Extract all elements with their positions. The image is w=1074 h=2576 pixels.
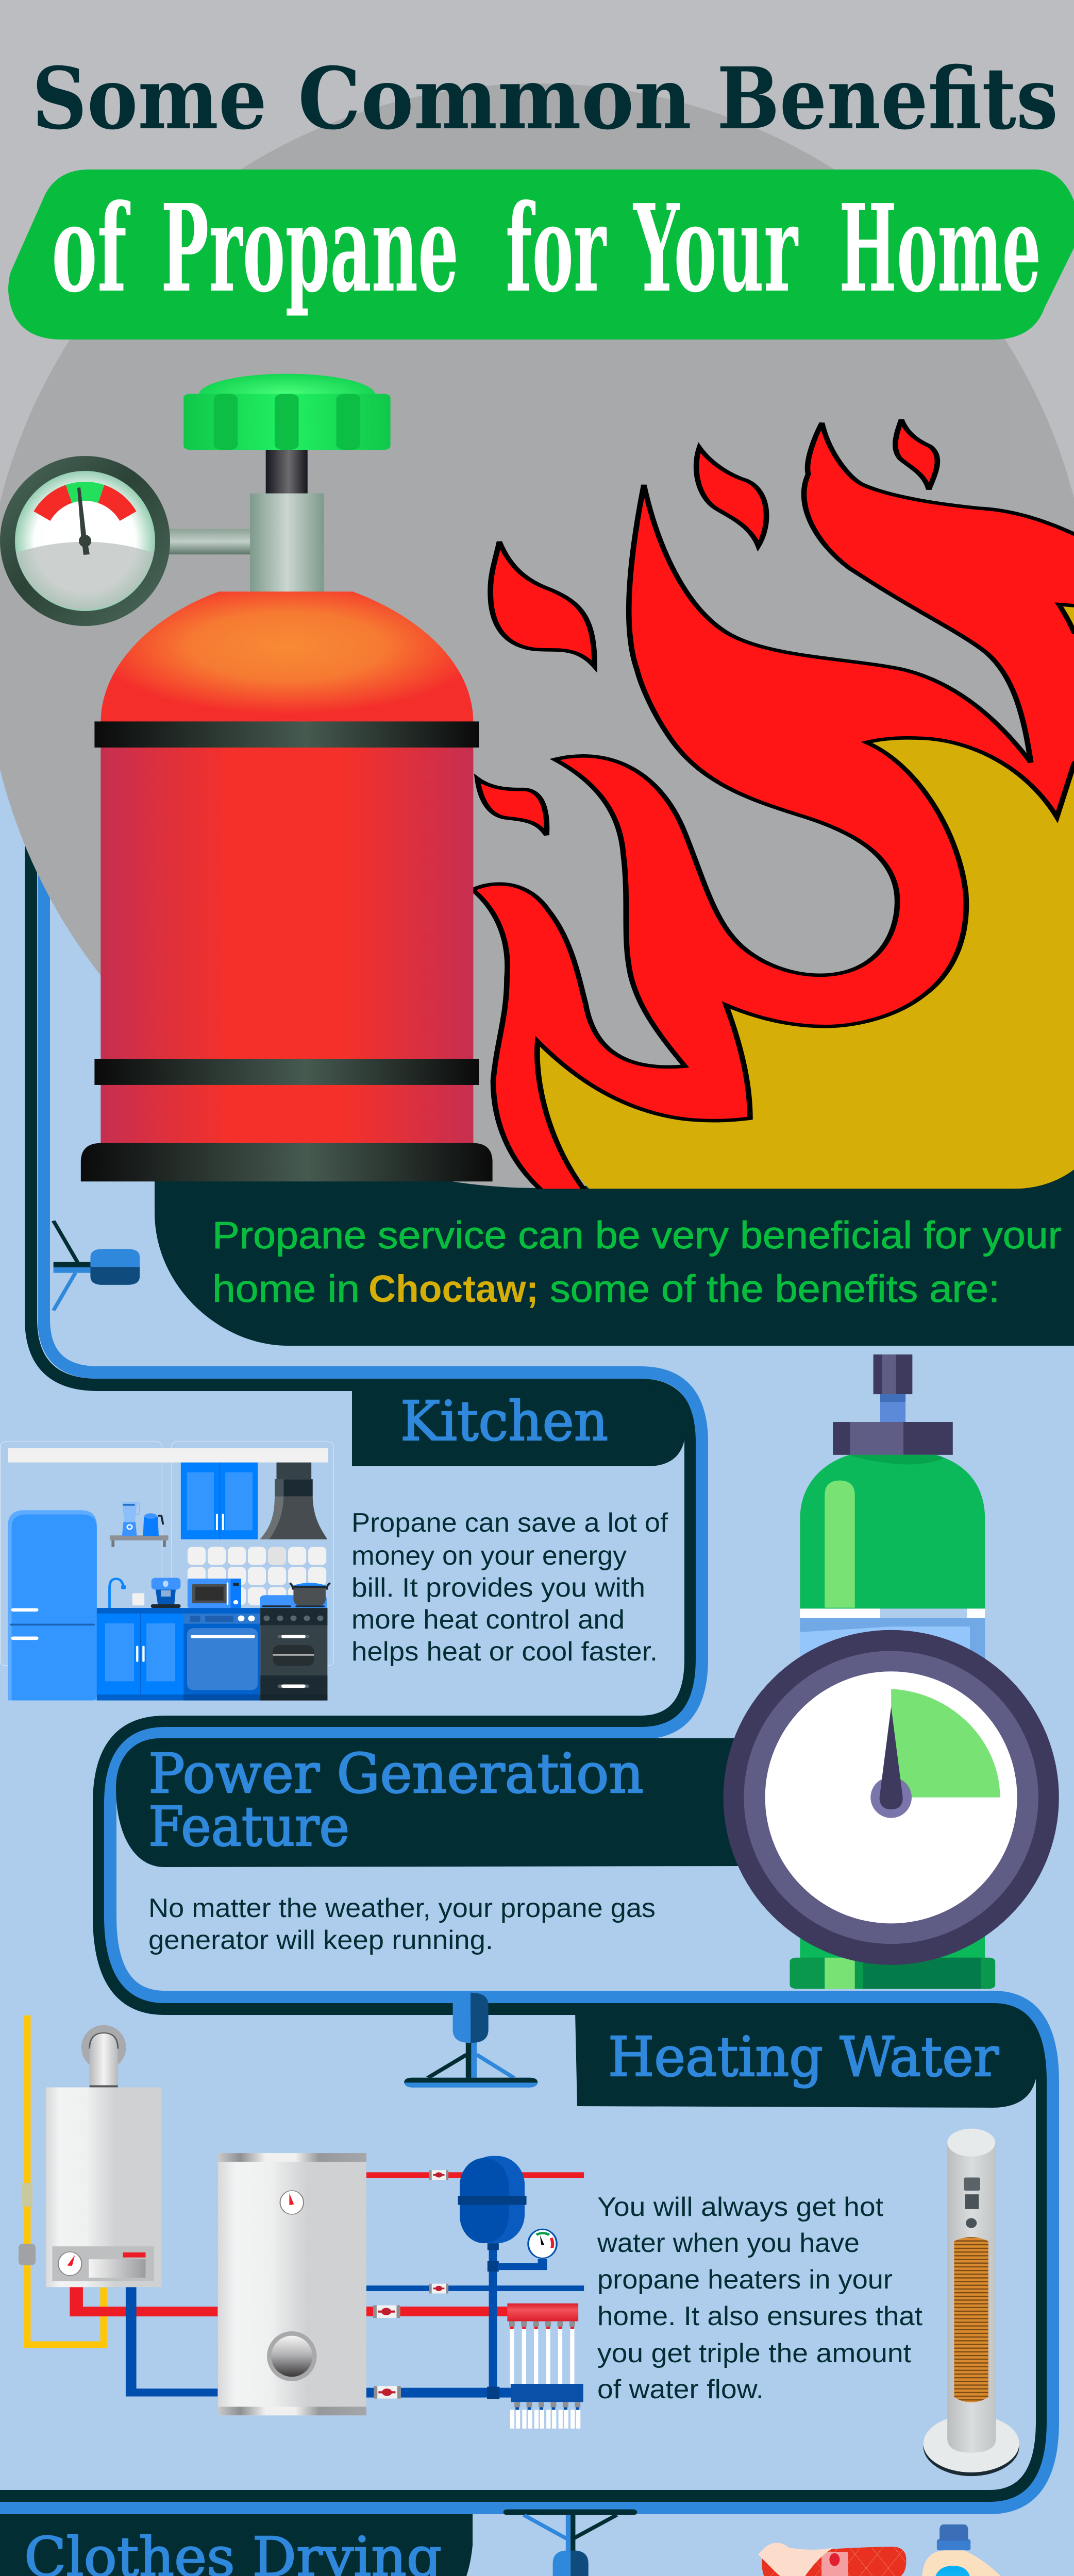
- title banner: Propane: [161, 178, 459, 319]
- illustration: green cylinder with gauge: [724, 1354, 1059, 1989]
- icon: yellow gas line: [19, 2015, 104, 2345]
- outgoing pipes: [366, 2172, 584, 2399]
- blue manifold: [510, 2384, 583, 2429]
- fridge: [8, 1510, 97, 1701]
- icon: centre pipe bracket: [404, 1993, 538, 2088]
- icon: pressure gauge: [0, 456, 170, 626]
- small pressure gauge: [528, 2229, 557, 2258]
- panel: power generation heading: [116, 1738, 742, 1867]
- kitchen text: [351, 1508, 668, 1667]
- cylinder base: [790, 1958, 995, 1989]
- intro text: some of the benefits are:: [550, 1267, 1000, 1310]
- illustration: red propane tank: [81, 374, 493, 1181]
- red manifold: [507, 2303, 578, 2384]
- flame: spark C: [895, 419, 937, 489]
- range hood: [260, 1463, 327, 1539]
- pipes to boiler: [76, 2287, 217, 2393]
- heating water text: You will always get hot: [597, 2192, 884, 2222]
- panel: heating water heading: [575, 2012, 1036, 2108]
- cylinder top valve: [833, 1354, 953, 1455]
- valve neck: [250, 494, 324, 594]
- tank band bottom: [94, 1059, 479, 1085]
- tank dome: [100, 591, 473, 722]
- detergent bottle: [922, 2524, 1014, 2576]
- grey circle backdrop: [0, 83, 1074, 1188]
- panel: heating water heading: Heating Water: [608, 2025, 999, 2089]
- small shelf with blender and kettle: [110, 1502, 169, 1547]
- intro text: Propane service can be very beneficial for your: [212, 1214, 1062, 1257]
- oven with pot: [260, 1583, 330, 1701]
- panel: power generation heading: Power Generation: [148, 1742, 644, 1805]
- coffee machine: [151, 1578, 180, 1608]
- kitchen text: more heat control and: [351, 1605, 625, 1635]
- cylinder body: [800, 1455, 985, 1608]
- panel: power generation heading: Feature: [148, 1795, 349, 1858]
- panel: intro dark background: [155, 1154, 1074, 1346]
- large gauge: [724, 1630, 1059, 1965]
- flame: spark A: [491, 541, 595, 666]
- wall tiles: [188, 1547, 326, 1605]
- title banner: Your: [632, 178, 799, 319]
- icon: left pipe bracket: [54, 1221, 140, 1311]
- side pipe: [164, 529, 250, 554]
- faucet, outlet: [110, 1579, 144, 1608]
- power generation text: [148, 1893, 656, 1955]
- intro text: [212, 1214, 1062, 1310]
- flame: yellow right tip: [1054, 602, 1074, 635]
- heater coil: [954, 2237, 988, 2402]
- illustration: kitchen: [1, 1442, 333, 1701]
- kitchen text: helps heat or cool faster.: [351, 1637, 658, 1667]
- heating water text: of water flow.: [597, 2375, 764, 2404]
- flame: big red: [473, 423, 1074, 1196]
- illustration: tower heater: [924, 2129, 1019, 2476]
- intro text: home in: [212, 1267, 360, 1310]
- heating water text: [597, 2192, 923, 2404]
- title banner: of: [52, 178, 130, 319]
- heating water text: home. It also ensures that: [597, 2301, 923, 2331]
- valve cap: [183, 374, 391, 450]
- title banner: [8, 170, 1074, 340]
- power generation text: generator will keep running.: [148, 1925, 493, 1955]
- flame: yellow core: [537, 738, 1074, 1189]
- title banner: for: [506, 178, 607, 319]
- valve stem: [266, 450, 308, 494]
- upper cabinet: [181, 1463, 258, 1539]
- lower cabinet: [97, 1608, 183, 1701]
- kitchen text: Propane can save a lot of: [351, 1508, 668, 1538]
- panel: kitchen heading: Kitchen: [400, 1389, 608, 1453]
- gauge needle: [77, 487, 91, 555]
- power generation text: No matter the weather, your propane gas: [148, 1893, 656, 1923]
- connecting pipe: [0, 721, 1053, 2508]
- expansion vessel: [458, 2156, 527, 2243]
- kitchen text: bill. It provides you with: [351, 1573, 645, 1603]
- heater controls: [964, 2178, 980, 2228]
- flame: spark D: [477, 778, 547, 835]
- microwave: [188, 1579, 241, 1608]
- intro text: Choctaw;: [368, 1267, 539, 1310]
- valves: [373, 2170, 448, 2399]
- tank base: [81, 1143, 493, 1181]
- gauge arcs: [42, 492, 128, 516]
- tank band top: [94, 721, 479, 748]
- heating water text: you get triple the amount: [597, 2338, 912, 2368]
- dishwasher: [183, 1608, 260, 1701]
- tank body: [100, 745, 473, 1145]
- panel: kitchen heading: [352, 1388, 685, 1466]
- title: Some: [32, 48, 267, 148]
- illustration: water heating system: [46, 2025, 584, 2429]
- kitchen text: money on your energy: [351, 1541, 627, 1571]
- heating water text: propane heaters in your: [597, 2265, 893, 2295]
- illustration: fire: [473, 419, 1074, 1196]
- storage tank: [218, 2153, 366, 2415]
- boiler: [46, 2025, 161, 2287]
- title: Common: [298, 48, 692, 148]
- illustration: washing machine with laundry: [732, 2524, 1032, 2576]
- folded clothes: [758, 2543, 907, 2576]
- heating water text: water when you have: [597, 2228, 860, 2258]
- flame: spark B: [696, 448, 766, 546]
- icon: bottom pipe bracket: [504, 2510, 637, 2576]
- title: [32, 48, 1058, 148]
